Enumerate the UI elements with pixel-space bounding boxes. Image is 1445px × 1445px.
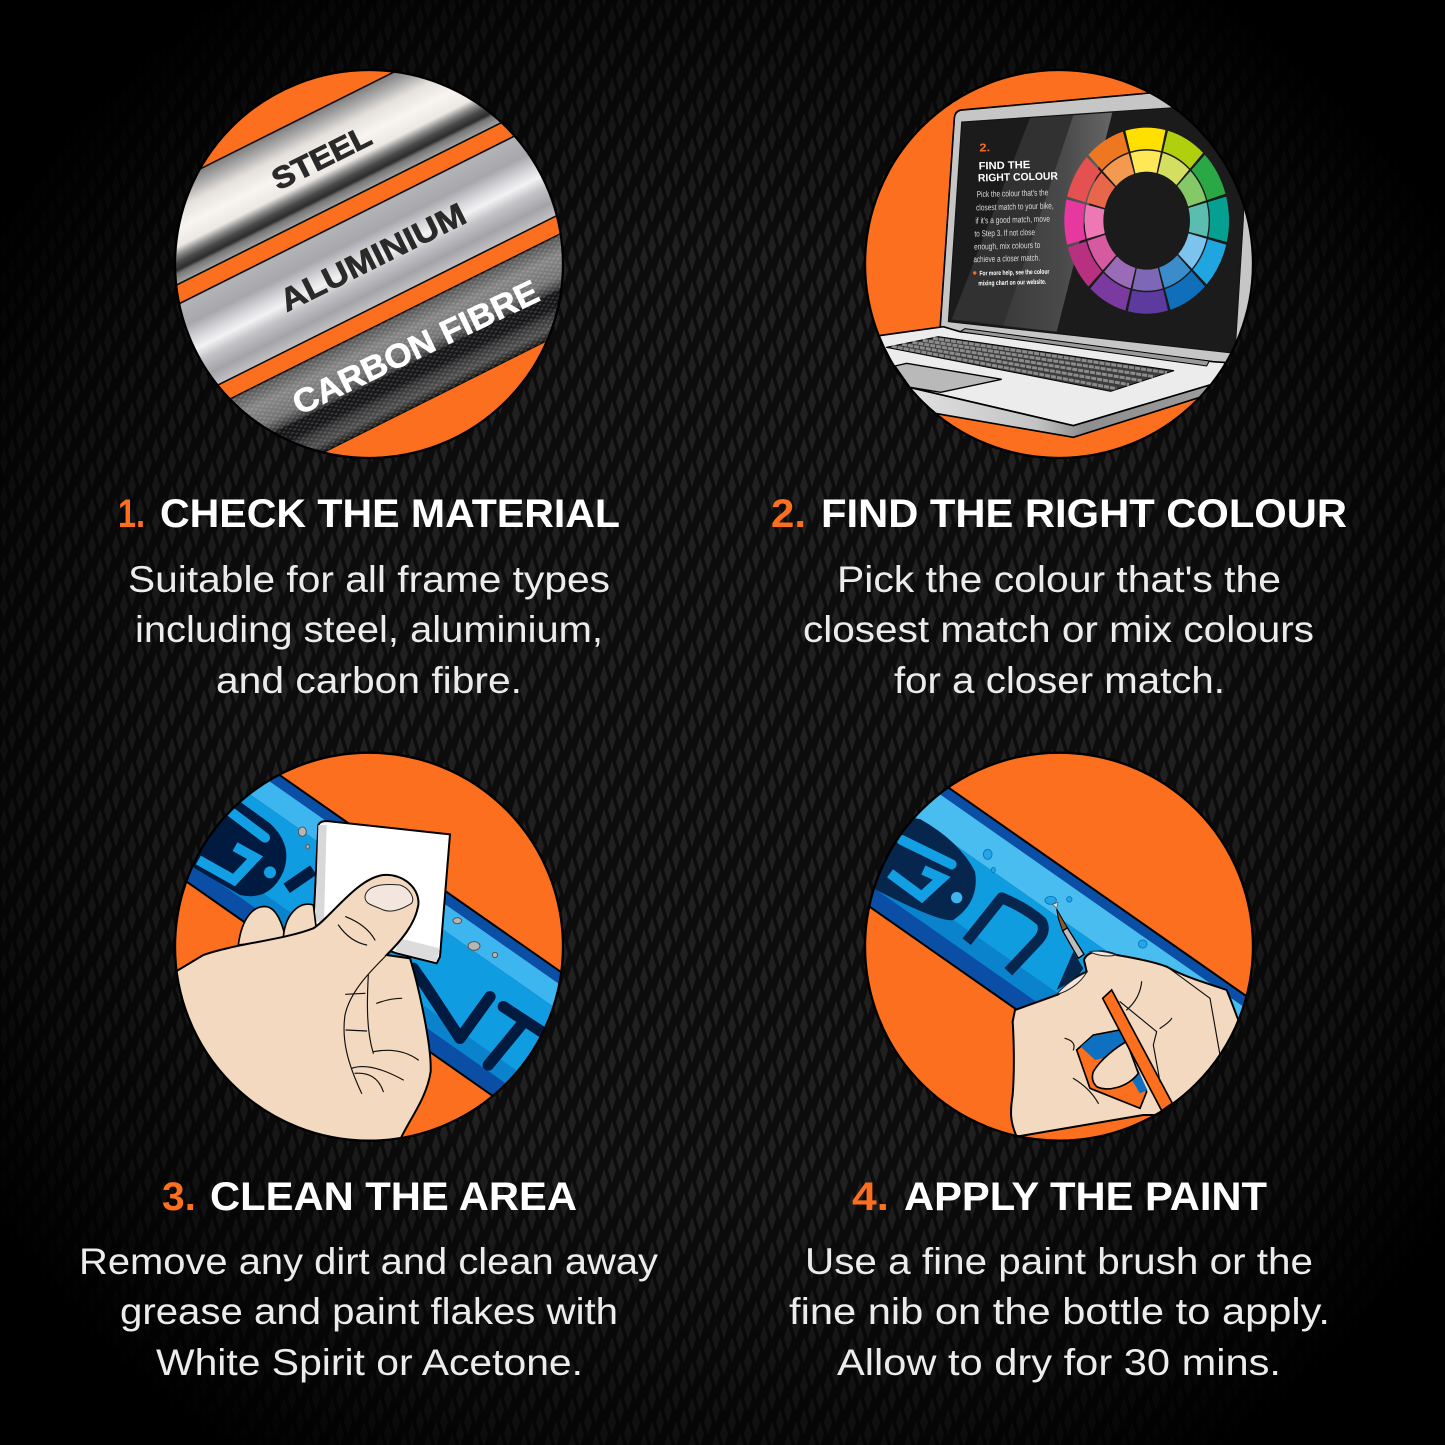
finger gap [1077, 1030, 1147, 1108]
panel: apply the paint [789, 702, 1330, 1383]
screen text [970, 140, 1061, 288]
heading: step 4: APPLY THE PAINT [904, 1175, 1267, 1219]
fingers [238, 907, 286, 945]
heading: step 2: FIND THE RIGHT COLOUR [821, 492, 1347, 536]
laptop base [880, 326, 1226, 425]
paint flecks [983, 849, 1147, 948]
screen text: Pick the colour that's the [977, 187, 1049, 199]
text: step 4 body: fine nib on the bottle to apply. [789, 1291, 1330, 1332]
thumbnail [365, 884, 413, 911]
screen text: achieve a closer match. [973, 253, 1040, 264]
text: step 2 body: for a closer match. [894, 660, 1225, 701]
heading: step 1: 1. [118, 492, 145, 536]
panel: check the material [120, 69, 619, 694]
logo lettering [183, 798, 547, 1065]
screen text: FIND THE [978, 159, 1030, 172]
text: step 4 body [789, 1241, 1330, 1383]
panel: clean the area [82, 752, 658, 1382]
text: step 2 body: Pick the colour that's the [837, 559, 1281, 600]
illustration: frame material tubes: CARBON FIBRE [287, 274, 545, 423]
text: step 2 body [803, 559, 1314, 701]
brush handle [1103, 990, 1172, 1111]
nails [1057, 972, 1087, 994]
text: step 4 body: Use a fine paint brush or the [805, 1241, 1313, 1282]
text: step 4 body: Allow to dry for 30 mins. [837, 1342, 1281, 1383]
text: step 1 body: Suitable for all frame types [128, 559, 610, 600]
cloth [314, 821, 450, 963]
screen text: 2. [979, 142, 990, 154]
screen text: if it's a good match, move [975, 214, 1050, 226]
heading: step 4: 4. [852, 1175, 889, 1219]
keyboard [886, 337, 1174, 391]
creases [1065, 968, 1220, 1103]
illustration: frame material tubes [174, 69, 564, 459]
illustration: frame material tubes: STEEL [267, 120, 377, 197]
logo lettering [867, 817, 1083, 990]
panel: find the right colour [771, 60, 1347, 701]
text: step 3 body: Remove any dirt and clean away [79, 1241, 659, 1282]
text: step 1 body: including steel, aluminium, [135, 609, 603, 650]
text: step 1 body [128, 559, 610, 701]
text: step 2 body: closest match or mix colours [803, 609, 1314, 650]
illustration: hand wiping frame with cloth [174, 752, 564, 1142]
colour wheel [1064, 128, 1229, 314]
illustration: laptop with colour wheel [864, 69, 1254, 459]
heading: step 2: 2. [771, 492, 806, 536]
finger [1092, 1042, 1138, 1089]
trackpad [895, 363, 1002, 392]
heading: step 3: 3. [162, 1175, 196, 1219]
text: step 3 body: grease and paint flakes with [120, 1291, 618, 1332]
text: step 3 body [79, 1241, 659, 1383]
brush [1053, 902, 1084, 958]
hand [1010, 950, 1238, 1136]
illustration: hand applying paint with brush [864, 752, 1254, 1142]
hand [178, 874, 432, 1140]
creases [338, 917, 418, 1093]
screen text: to Step 3. If not close [974, 227, 1035, 239]
text: step 1 body: and carbon fibre. [216, 660, 522, 701]
laptop lid [939, 92, 1252, 362]
blue frame tube [870, 788, 1246, 1018]
text: step 3 body: White Spirit or Acetone. [156, 1342, 583, 1383]
heading: step 1: CHECK THE MATERIAL [160, 492, 620, 536]
screen text: mixing chart on our website. [978, 279, 1047, 288]
paint flakes [298, 827, 498, 958]
screen text: closest match to your bike, [976, 201, 1054, 213]
laptop screen [948, 103, 1247, 353]
hinge [960, 329, 1209, 366]
illustration: frame material tubes: ALUMINIUM [274, 196, 472, 319]
heading: step 3: CLEAN THE AREA [210, 1175, 577, 1219]
screen text: enough, mix colours to [974, 240, 1041, 252]
screen text: For more help, see the colour [979, 269, 1050, 277]
blue frame tube [187, 775, 560, 1096]
screen text: RIGHT COLOUR [978, 170, 1058, 184]
